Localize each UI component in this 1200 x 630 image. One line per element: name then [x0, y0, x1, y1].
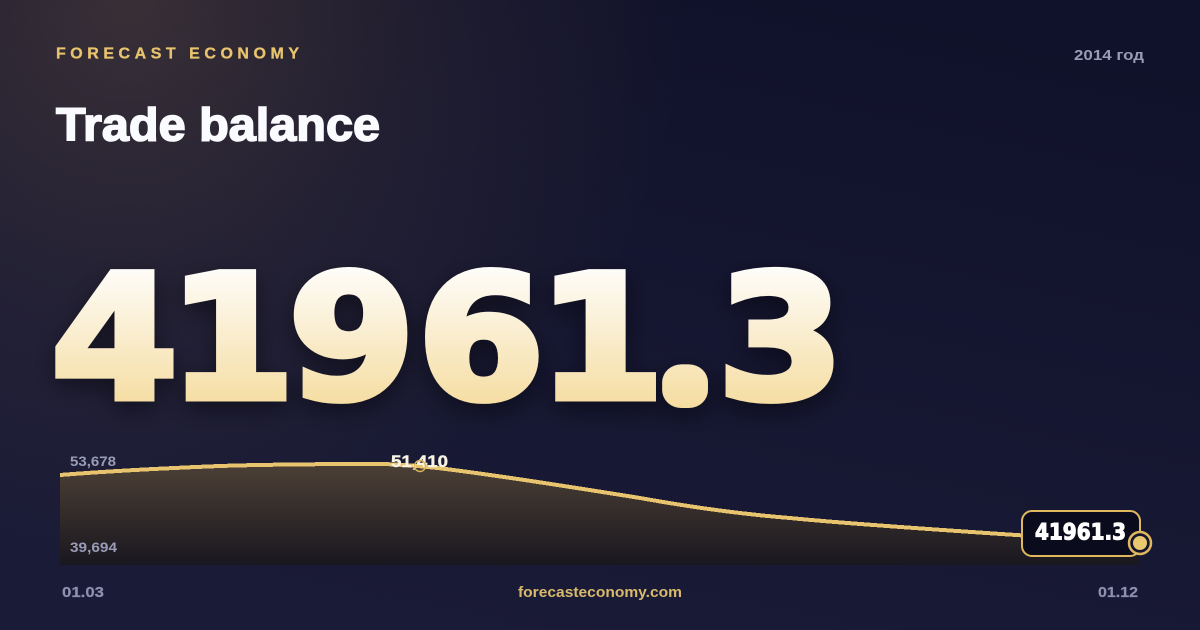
brand label: FORECAST ECONOMY — [56, 46, 299, 62]
title: Trade balance — [56, 98, 380, 150]
year label: 2014 год — [1074, 47, 1145, 64]
axis maximum: 53,678 — [70, 453, 116, 469]
start date: 01.03 — [62, 584, 104, 601]
axis minimum: 39,694 — [70, 539, 117, 555]
peak value label: 51,410 — [391, 452, 448, 471]
area chart — [60, 452, 1151, 565]
current value marker — [1129, 532, 1151, 554]
peak marker — [414, 460, 426, 472]
big value: 3 — [717, 238, 844, 439]
chart line — [60, 464, 1140, 543]
big value: 41961 — [51, 238, 665, 439]
current value badge — [1022, 511, 1140, 556]
big value: . — [677, 353, 693, 400]
current value badge: 41961.3 — [1035, 520, 1126, 546]
end date: 01.12 — [1098, 584, 1138, 601]
source url: forecasteconomy.com — [518, 584, 682, 601]
chart area fill — [60, 464, 1140, 565]
